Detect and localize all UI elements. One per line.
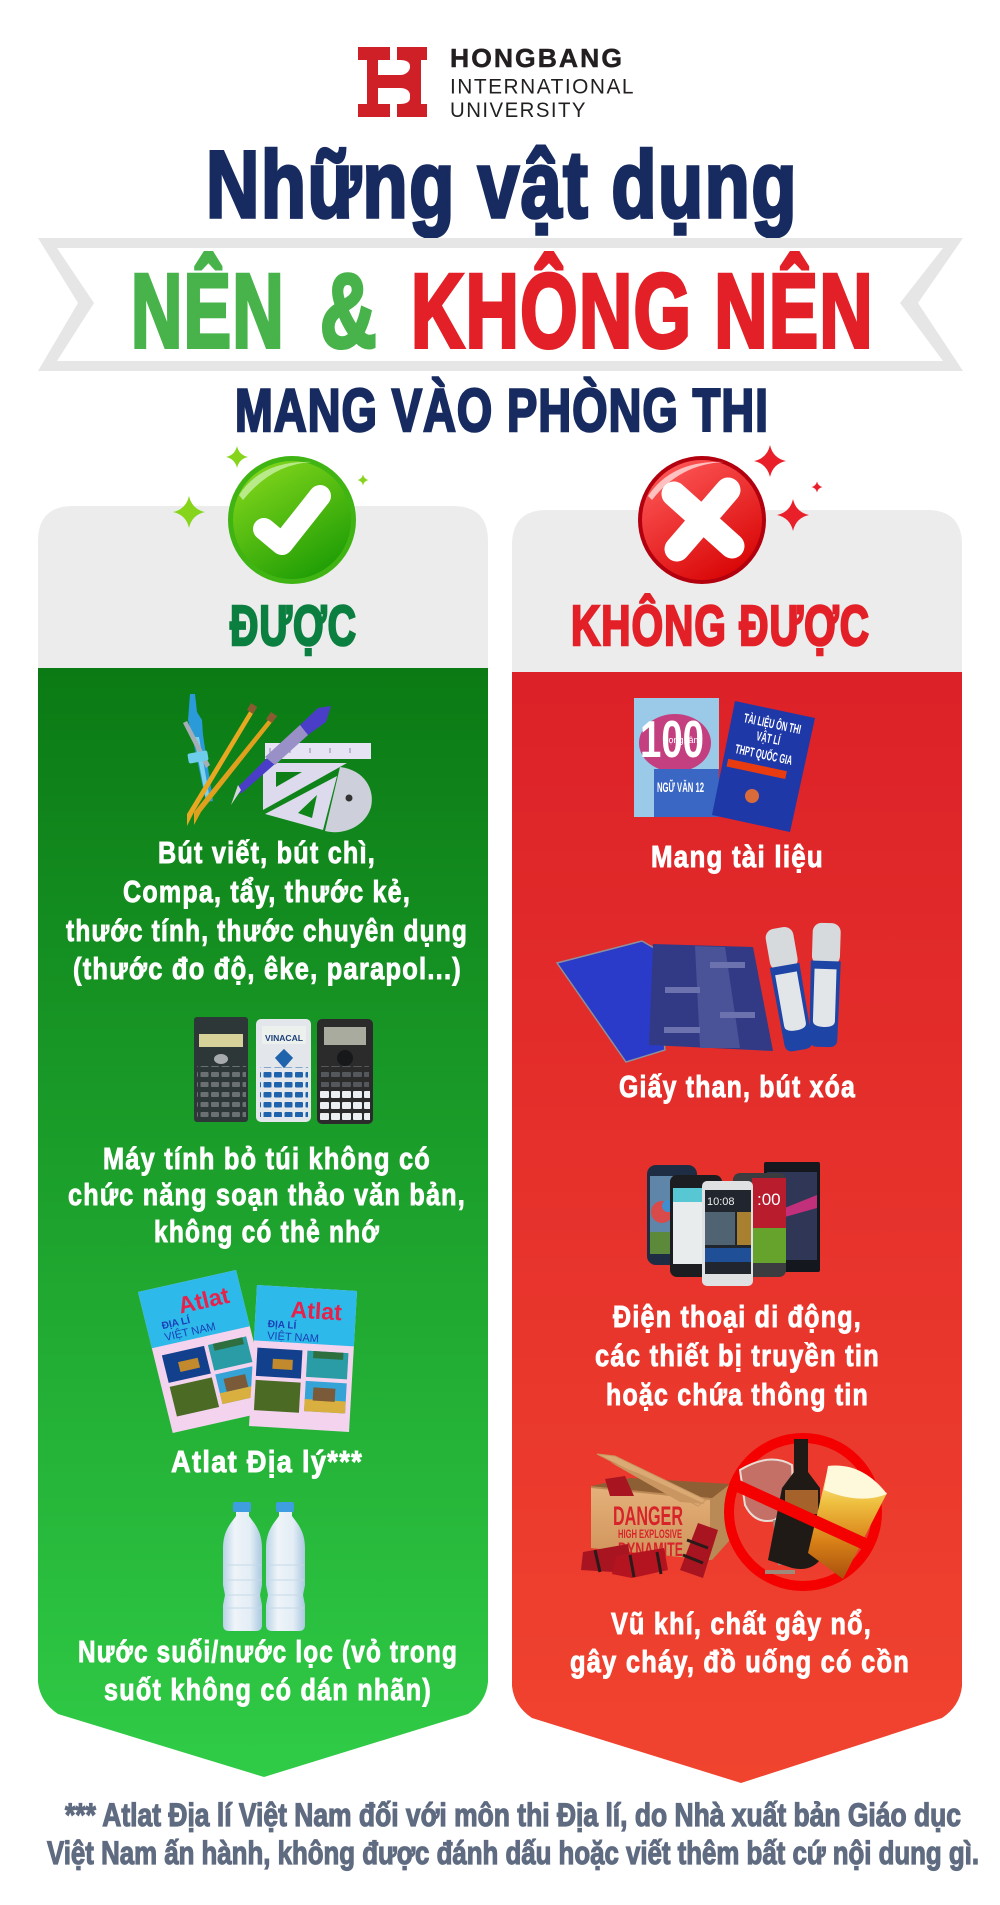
icon: smartphones: 10:08 [707, 1196, 735, 1208]
logo: Hong Bang International University [358, 43, 635, 122]
icon: green check mark [228, 456, 356, 584]
icon: books: NGỮ VĂN 12 [657, 778, 704, 795]
icon: red sparkles [754, 445, 822, 531]
panel: allowed items [38, 446, 488, 1777]
panel body [38, 668, 488, 1777]
icon: plastic bottles [223, 1502, 305, 1631]
icon: dynamite crate [581, 1454, 730, 1578]
icon: books: THPT QUỐC GIA [734, 741, 794, 768]
icon: books: 100 [640, 711, 704, 769]
item: water bottles [78, 1502, 458, 1707]
caption: chức năng soạn thảo văn bản, [68, 1177, 466, 1212]
subtitle: Mang vào phòng thi: MANG VÀO PHÒNG THI [235, 377, 769, 444]
banner heading: NÊN and KHÔNG NÊN: & [320, 253, 378, 370]
caption [66, 835, 468, 986]
caption: hoặc chứa thông tin [606, 1377, 869, 1412]
icon: dynamite crate: DANGER [613, 1501, 683, 1531]
icon: atlas books: ĐỊA LÍ [267, 1317, 298, 1332]
icon: atlas books: VIỆT NAM [267, 1329, 319, 1345]
caption: Bút viết, bút chì, [158, 835, 376, 870]
title: Những vật dụng: Những vật dụng [206, 132, 798, 238]
panel header background [512, 510, 962, 672]
caption: gây cháy, đồ uống có cồn [570, 1644, 910, 1679]
heading: Không được: KHÔNG ĐƯỢC [571, 593, 870, 658]
caption: Mang tài liệu [651, 839, 824, 874]
caption [78, 1634, 458, 1707]
caption: các thiết bị truyền tin [595, 1338, 880, 1373]
item: weapons, explosives and alcohol [570, 1438, 910, 1679]
icon: books: VẬT LÍ [755, 728, 782, 748]
icon: books: trọng tâm [663, 735, 701, 745]
icon: alcohol prohibited [729, 1438, 887, 1586]
logo wordmark: HONGBANG [450, 43, 624, 73]
item: mobile phones [595, 1162, 880, 1412]
logo wordmark [450, 43, 635, 122]
icon: atlas books [138, 1270, 357, 1433]
icon: H emblem [358, 47, 427, 117]
icon: calculators: VINACAL [265, 1034, 303, 1043]
logo wordmark: INTERNATIONAL [450, 76, 635, 98]
caption: Nước suối/nước lọc (vỏ trong [78, 1634, 458, 1669]
panel: forbidden items [512, 445, 962, 1783]
caption: thước tính, thước chuyên dụng [66, 913, 468, 948]
caption: Máy tính bỏ túi không có [103, 1141, 431, 1176]
item: pens, pencils and rulers [66, 694, 468, 986]
item: geography atlas [138, 1270, 363, 1479]
icon: carbon paper and correction pens [557, 923, 842, 1062]
caption: Atlat Địa lý*** [171, 1444, 363, 1479]
caption: Vũ khí, chất gây nổ, [611, 1606, 872, 1641]
caption: Điện thoại di động, [613, 1299, 862, 1334]
ribbon inner [57, 248, 943, 361]
ribbon outer band [38, 238, 963, 371]
icon: atlas books: Atlat [176, 1282, 232, 1319]
panel header background [38, 506, 488, 668]
logo wordmark: UNIVERSITY [450, 99, 587, 122]
icon: books [634, 698, 815, 832]
icon: green sparkles [173, 446, 368, 528]
icon: dynamite crate: DYNAMITE [618, 1540, 683, 1561]
caption: suốt không có dán nhãn) [104, 1672, 432, 1707]
caption: Compa, tẩy, thước kẻ, [123, 874, 411, 909]
icon: books: TÀI LIỆU ÔN THI [743, 710, 802, 737]
item: pocket calculators [68, 1017, 466, 1249]
item: carbon paper and correction pens [557, 923, 856, 1104]
footnote [47, 1797, 979, 1871]
banner heading: NÊN and KHÔNG NÊN [131, 252, 874, 370]
icon: atlas books: Atlat [290, 1296, 343, 1325]
banner heading: NÊN and KHÔNG NÊN: NÊN [131, 252, 285, 370]
icon: atlas books: ĐỊA LÍ [160, 1313, 192, 1332]
item: study materials [634, 698, 824, 874]
heading: Được: ĐƯỢC [230, 594, 357, 658]
icon: dynamite crate: HIGH EXPLOSIVE [618, 1527, 682, 1541]
banner ribbon [38, 238, 963, 371]
caption [595, 1299, 880, 1412]
icon: calculators [194, 1017, 373, 1124]
panel body [512, 672, 962, 1783]
icon: smartphones [647, 1162, 820, 1286]
caption: Giấy than, bút xóa [619, 1069, 856, 1104]
caption [570, 1606, 910, 1679]
caption: không có thẻ nhớ [154, 1214, 380, 1249]
icon: atlas books: VIỆT NAM [163, 1320, 217, 1344]
icon: smartphones: :00 [757, 1190, 781, 1209]
caption [68, 1141, 466, 1249]
icon: red cross mark [638, 456, 766, 584]
caption: (thước đo độ, êke, parapol...) [73, 951, 462, 986]
icon: drawing tools [183, 694, 372, 832]
